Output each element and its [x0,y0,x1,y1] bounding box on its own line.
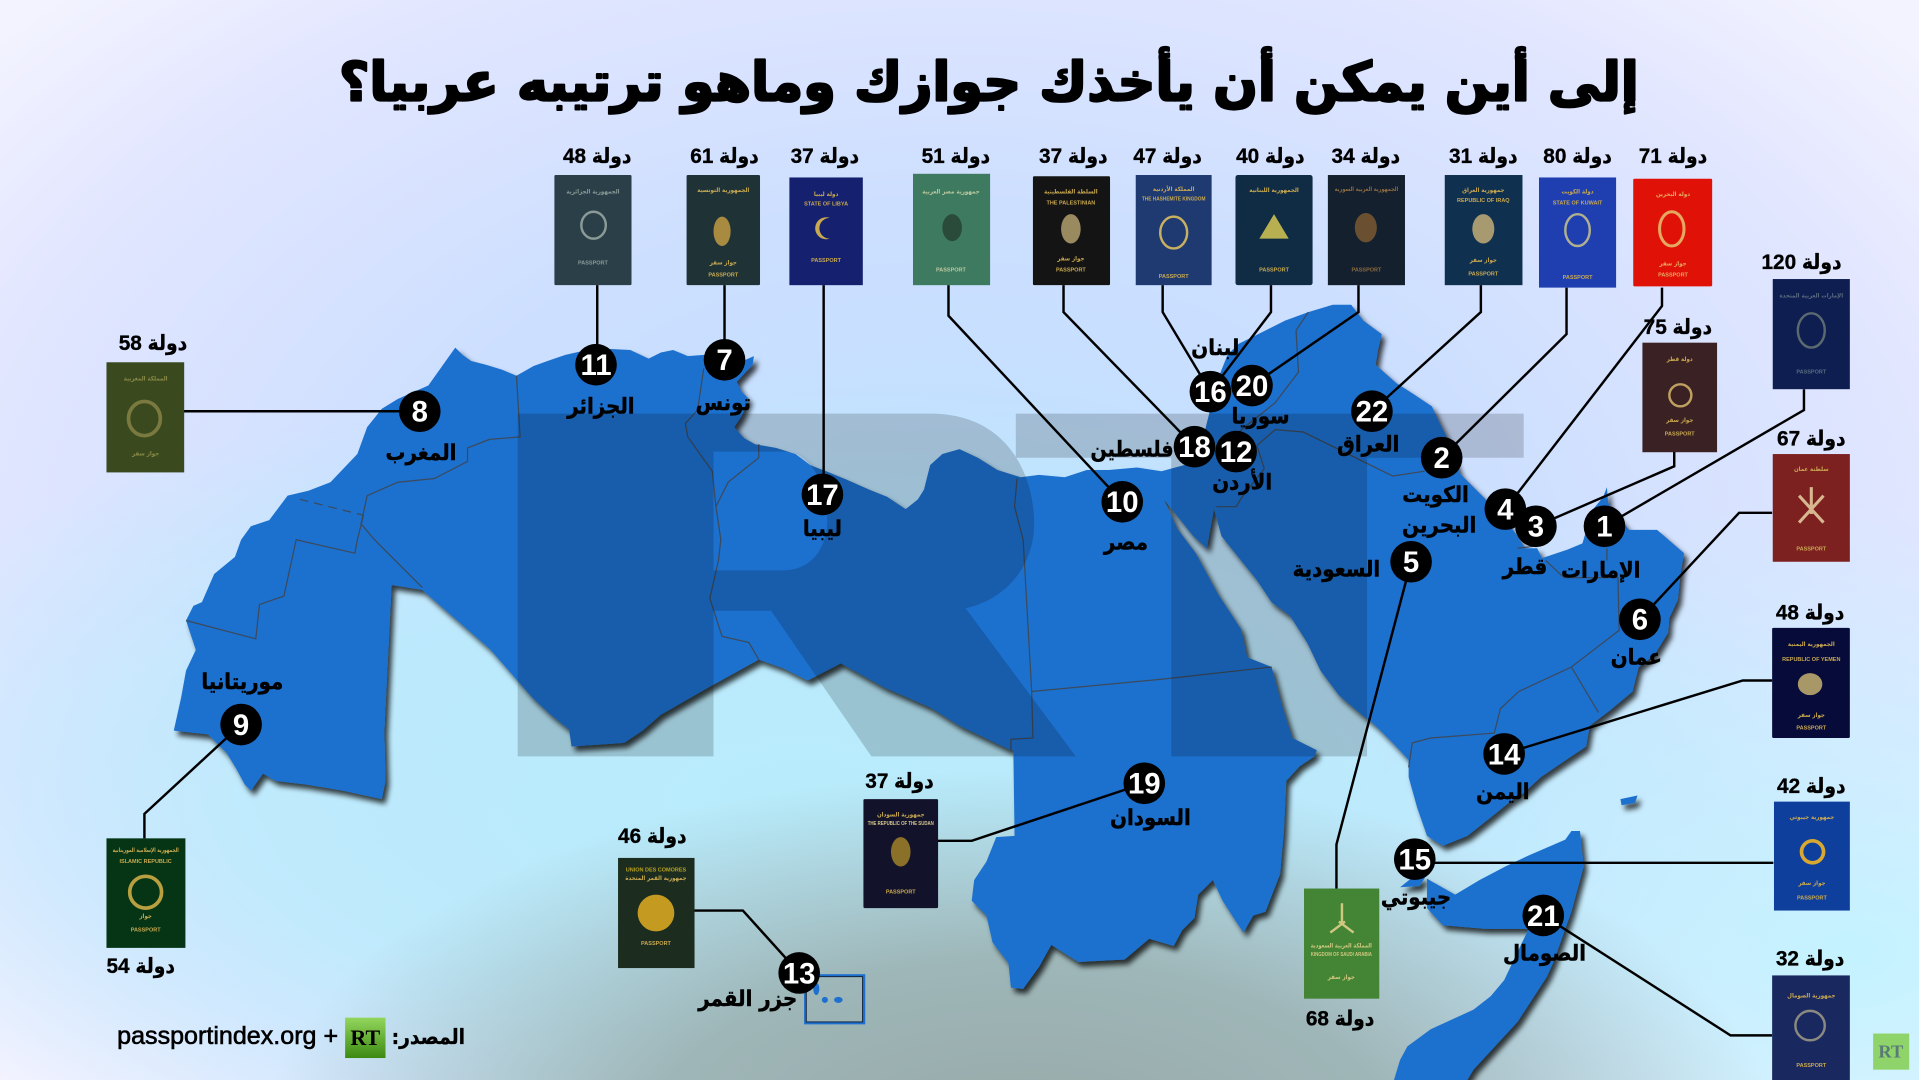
rank markers [220,339,1661,994]
source line [117,1018,465,1058]
source line: المصدر: [392,1025,465,1049]
passport: Iraq: REPUBLIC OF IRAQ [1457,198,1510,204]
passport: Yemen: جواز سفر [1797,712,1825,719]
visa-free counts: دولة 34 [1332,145,1400,168]
visa-free counts: دولة 71 [1639,145,1707,168]
rank markers: 21 [1527,900,1560,933]
rank markers: 4 [1497,494,1514,527]
country names: سوريا [1231,404,1290,429]
country names: الكويت [1402,483,1469,508]
passport: Sudan: THE REPUBLIC OF THE SUDAN [868,821,934,827]
passport: Iraq: PASSPORT [1468,271,1499,277]
country names: الأردن [1212,468,1272,496]
RT corner logo [1873,1034,1909,1070]
passport: Egypt: PASSPORT [936,268,966,274]
passport: Morocco: جواز سفر [131,450,159,457]
passport: Kuwait: PASSPORT [1563,275,1593,281]
passport: Comoros [618,858,695,968]
RT watermark [518,414,1524,756]
passport: Somalia [1772,975,1850,1080]
passport: Mauritania: PASSPORT [131,927,161,933]
visa-free counts: دولة 61 [690,145,759,168]
passport: Qatar: PASSPORT [1665,432,1695,438]
passport: Syria [1328,175,1405,285]
passport: Jordan [1136,175,1212,285]
country names: عمان [1611,646,1662,671]
visa-free counts: دولة 51 [922,145,990,168]
rank markers: 19 [1128,768,1161,801]
passport: Tunisia: الجمهورية التونسية [697,187,749,194]
passport: Saudi Arabia [1304,889,1379,999]
passport: Comoros: PASSPORT [641,941,672,947]
visa-free counts: دولة 42 [1777,775,1846,798]
country names: جيبوتي [1381,885,1451,910]
passport: Lebanon: الجمهورية اللبنانية [1249,187,1299,194]
passport: Djibouti [1774,802,1850,911]
passport: Tunisia: جواز سفر [709,259,737,266]
passport: Iraq: جمهورية العراق [1462,187,1505,194]
rank markers: 9 [233,709,249,742]
country names: السعودية [1293,557,1380,582]
passport: Tunisia: PASSPORT [708,273,739,279]
visa-free counts: دولة 46 [618,825,687,848]
passport: Bahrain [1633,179,1712,286]
passport: Kuwait: STATE OF KUWAIT [1553,200,1603,206]
passport: Bahrain: دولة البحرين [1656,191,1690,198]
title: إلى أين يمكن أن يأخذك جوازك وماهو ترتيبه عربيا؟ [339,46,1639,113]
map: Arab world [174,305,1684,1080]
passport: Mauritania: الجمهورية الإسلامية الموريتانية [113,847,179,854]
visa-free counts: دولة 80 [1543,145,1612,168]
country names: قطر [1502,555,1547,580]
passport: Tunisia [687,175,760,285]
passport: Algeria: الجمهورية الجزائرية [566,188,620,195]
country names: الإمارات [1561,559,1640,584]
passport: Comoros: UNION DES COMORES [626,867,687,873]
passport: Sudan [863,799,938,908]
country names: البحرين [1402,513,1476,538]
rank markers: 20 [1236,370,1268,403]
passport: Oman: PASSPORT [1796,547,1827,553]
passport: Sudan: جمهورية السودان [877,811,925,818]
passport: Libya: STATE OF LIBYA [804,202,848,208]
country borders [186,312,1619,767]
rank markers: 18 [1178,431,1211,464]
passport: Lebanon: PASSPORT [1259,268,1290,274]
passport: Mauritania: جواز [138,913,152,920]
visa-free counts: دولة 32 [1776,948,1844,971]
passport: Qatar: دولة قطر [1666,356,1693,363]
rank markers: 3 [1528,511,1544,544]
passport: Oman [1773,454,1850,562]
passport: Djibouti: PASSPORT [1797,896,1827,902]
Comoros inset map [805,975,864,1023]
passport: Djibouti: جمهورية جيبوتي [1790,814,1834,821]
passport: Kuwait [1539,177,1616,288]
passport: Oman: سلطنة عمان [1794,466,1829,473]
rank markers: 8 [412,396,428,429]
visa-free counts: دولة 75 [1644,316,1712,339]
passport: Egypt [913,174,990,285]
visa-free counts: دولة 54 [106,955,175,978]
passport: Syria: PASSPORT [1352,268,1382,274]
country names: ليبيا [803,517,842,542]
rank markers: 14 [1488,738,1521,771]
passport: Jordan: THE HASHEMITE KINGDOM [1142,197,1206,203]
rank markers: 7 [716,344,733,377]
visa-free counts: دولة 58 [119,332,187,355]
passport: Comoros: جمهورية القمر المتحدة [625,875,687,882]
passport: Egypt: جمهورية مصر العربية [922,188,980,195]
passport: Syria: الجمهورية العربية السورية [1335,186,1398,193]
passport: Jordan: المملكة الأردنية [1153,185,1195,193]
country names: جزر القمر [697,987,797,1012]
visa-free counts: دولة 48 [563,145,631,168]
visa-free counts [106,145,1846,1031]
passport: Bahrain: جواز سفر [1658,261,1687,268]
passport: Palestine [1033,176,1110,285]
passport: Iraq [1445,175,1522,285]
passport: Morocco [106,362,184,472]
rank markers: 15 [1398,844,1431,877]
passport: Saudi Arabia: المملكة العربية السعودية [1311,942,1372,949]
rank markers: 12 [1220,436,1252,469]
passport: Kuwait: دولة الكويت [1562,188,1594,195]
rank markers: 17 [806,479,839,512]
country names: العراق [1337,433,1399,458]
passport: Palestine: THE PALESTINIAN [1046,200,1095,206]
passport: Palestine: PASSPORT [1056,268,1086,274]
passport: Saudi Arabia: KINGDOM OF SAUDI ARABIA [1311,952,1372,958]
passport: Libya: PASSPORT [811,258,842,264]
visa-free counts: دولة 31 [1449,145,1518,168]
rank markers: 16 [1194,376,1227,409]
country names: تونس [696,391,751,416]
visa-free counts: دولة 40 [1236,145,1305,168]
visa-free counts: دولة 48 [1776,601,1844,624]
passport: Algeria [554,175,632,285]
country names: المغرب [386,441,456,466]
passport: Djibouti: جواز سفر [1797,880,1826,887]
passport: Somalia: PASSPORT [1796,1063,1827,1069]
rank markers: 22 [1356,396,1388,429]
visa-free counts: دولة 120 [1761,251,1842,274]
passport: Yemen: PASSPORT [1796,725,1827,731]
visa-free counts: دولة 68 [1306,1008,1374,1031]
rank markers: 13 [783,957,816,990]
country names: موريتانيا [201,670,283,695]
passport: Lebanon [1235,175,1313,285]
passport: Jordan: PASSPORT [1159,274,1189,280]
RT corner logo: RT [1878,1041,1903,1061]
passport: Somalia: جمهورية الصومال [1787,992,1835,999]
country names: اليمن [1476,780,1530,805]
passport: Yemen: REPUBLIC OF YEMEN [1782,657,1840,663]
passport: Qatar [1642,343,1717,452]
connector lines [144,285,1804,1035]
country names: فلسطين [1090,438,1174,463]
rank markers: 1 [1596,511,1613,544]
visa-free counts: دولة 37 [1039,145,1108,168]
rank markers: 5 [1403,546,1419,579]
passport: Yemen [1772,628,1850,738]
rank markers: 6 [1632,604,1648,637]
passport: Saudi Arabia: جواز سفر [1327,974,1355,981]
country names: الصومال [1503,942,1586,967]
source line: RT [350,1025,381,1050]
passport: UAE: الإمارات العربية المتحدة [1779,292,1843,299]
country names: مصر [1103,531,1148,556]
passport: Algeria: PASSPORT [578,260,609,266]
country names: الجزائر [566,395,635,420]
source line: passportindex.org + [117,1022,338,1050]
passport: Mauritania: ISLAMIC REPUBLIC [120,859,172,865]
passport: Yemen: الجمهورية اليمنية [1788,641,1835,648]
rank markers: 2 [1434,442,1450,475]
passport: Libya [789,177,863,285]
passport: Libya: دولة ليبيا [814,191,838,198]
passport: Qatar: جواز سفر [1665,417,1693,424]
visa-free counts: دولة 67 [1777,427,1846,450]
passport: Sudan: PASSPORT [886,889,916,895]
passport: Palestine: السلطة الفلسطينية [1044,188,1098,195]
visa-free counts: دولة 37 [865,770,934,793]
passport: UAE: PASSPORT [1796,369,1827,375]
country names: لبنان [1191,336,1239,361]
country names: السودان [1110,806,1191,831]
passport: Morocco: المملكة المغربية [124,376,168,383]
passport: Iraq: جواز سفر [1469,257,1497,264]
visa-free counts: دولة 37 [791,145,859,168]
passport: Mauritania [106,838,185,948]
passport: Bahrain: PASSPORT [1658,273,1689,279]
rank markers: 10 [1106,486,1139,519]
visa-free counts: دولة 47 [1133,145,1202,168]
country names [201,336,1662,1012]
passport: UAE [1773,279,1850,389]
rank markers: 11 [580,349,612,382]
passport: Palestine: جواز سفر [1056,256,1084,263]
